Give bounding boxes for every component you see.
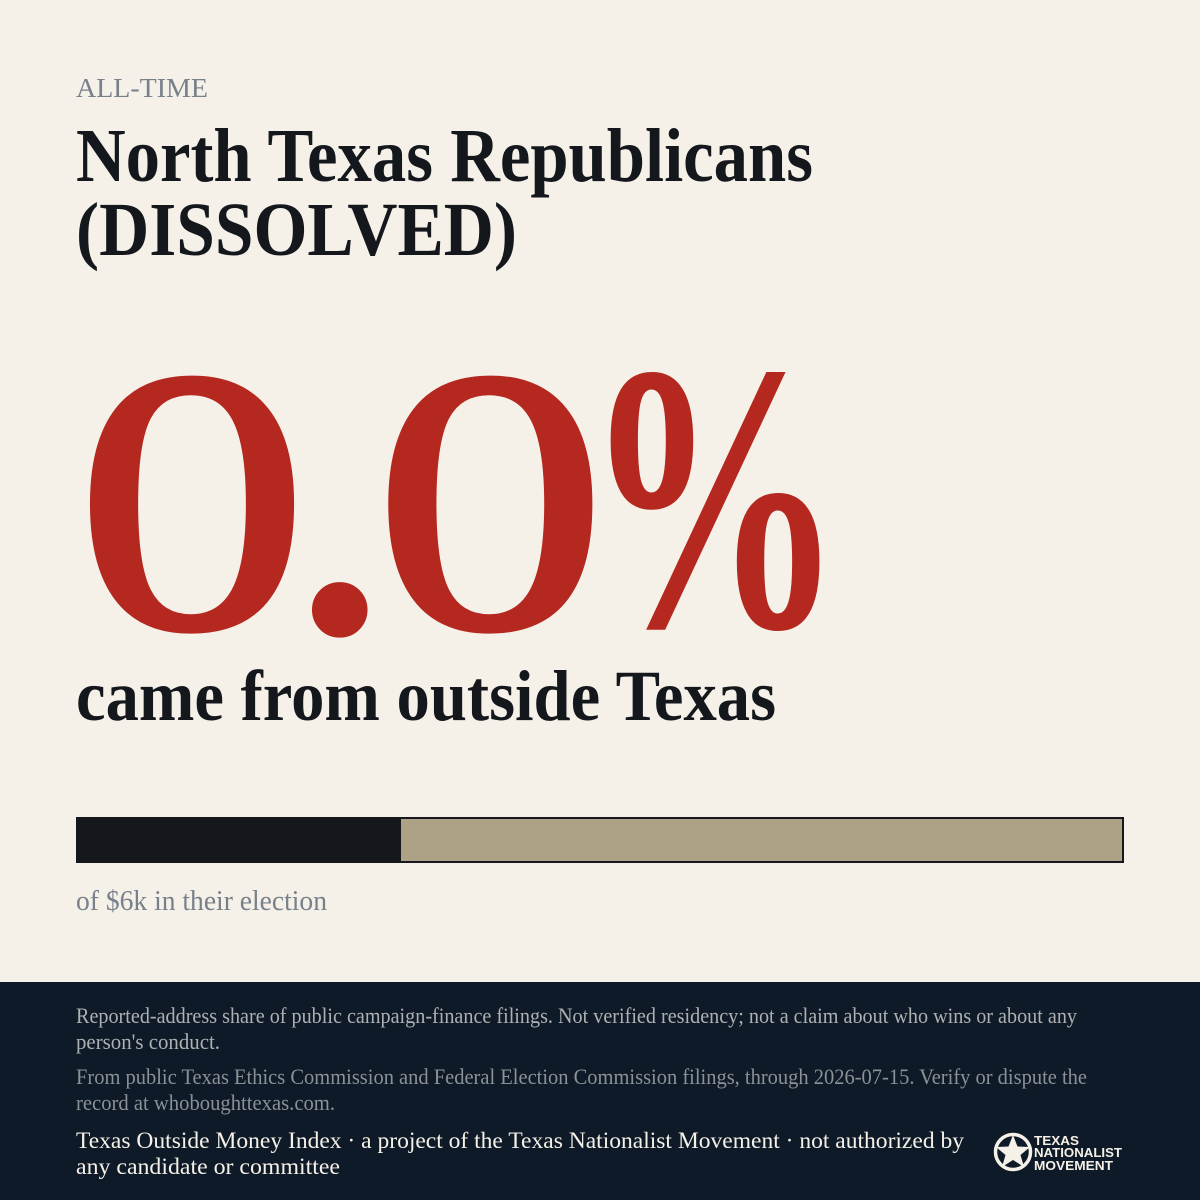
logo wordmark: TEXAS (1034, 1133, 1079, 1148)
progress bar (76, 817, 1123, 863)
big percentage (75, 212, 844, 733)
source text (76, 1064, 1087, 1115)
big percentage: % (584, 286, 844, 709)
big percentage: . (281, 212, 398, 733)
source text: From public Texas Ethics Commission and Federal Election Commission filings, through 2026-07-15. Verify or dispute the (76, 1064, 1087, 1089)
disclaimer text (76, 1003, 1077, 1054)
disclaimer text: person's conduct. (76, 1029, 220, 1054)
subheading: came from outside Texas (76, 656, 776, 736)
footer panel (0, 982, 1200, 1200)
disclaimer text: Reported-address share of public campaign-finance filings. Not verified residency; not a claim about who wins or about any (76, 1003, 1077, 1028)
icon: star in circle (996, 1134, 1030, 1170)
eyebrow label: ALL-TIME (76, 73, 208, 103)
logo wordmark: NATIONALIST (1034, 1145, 1122, 1160)
title: (DISSOLVED) (76, 188, 517, 272)
source text: record at whoboughttexas.com. (76, 1090, 335, 1115)
title: North Texas Republicans (76, 114, 813, 198)
bar caption: of $6k in their election (76, 885, 327, 917)
attribution text (76, 1128, 964, 1179)
attribution text: any candidate or committee (76, 1154, 340, 1179)
attribution text: Texas Outside Money Index · a project of the Texas Nationalist Movement · not authorized by (76, 1128, 964, 1153)
logo wordmark: MOVEMENT (1034, 1158, 1113, 1173)
big percentage: 0 (374, 294, 607, 709)
title (76, 114, 813, 272)
logo wordmark (1034, 1133, 1122, 1173)
big percentage: 0 (75, 294, 309, 709)
logo: Texas Nationalist Movement (996, 1133, 1122, 1173)
